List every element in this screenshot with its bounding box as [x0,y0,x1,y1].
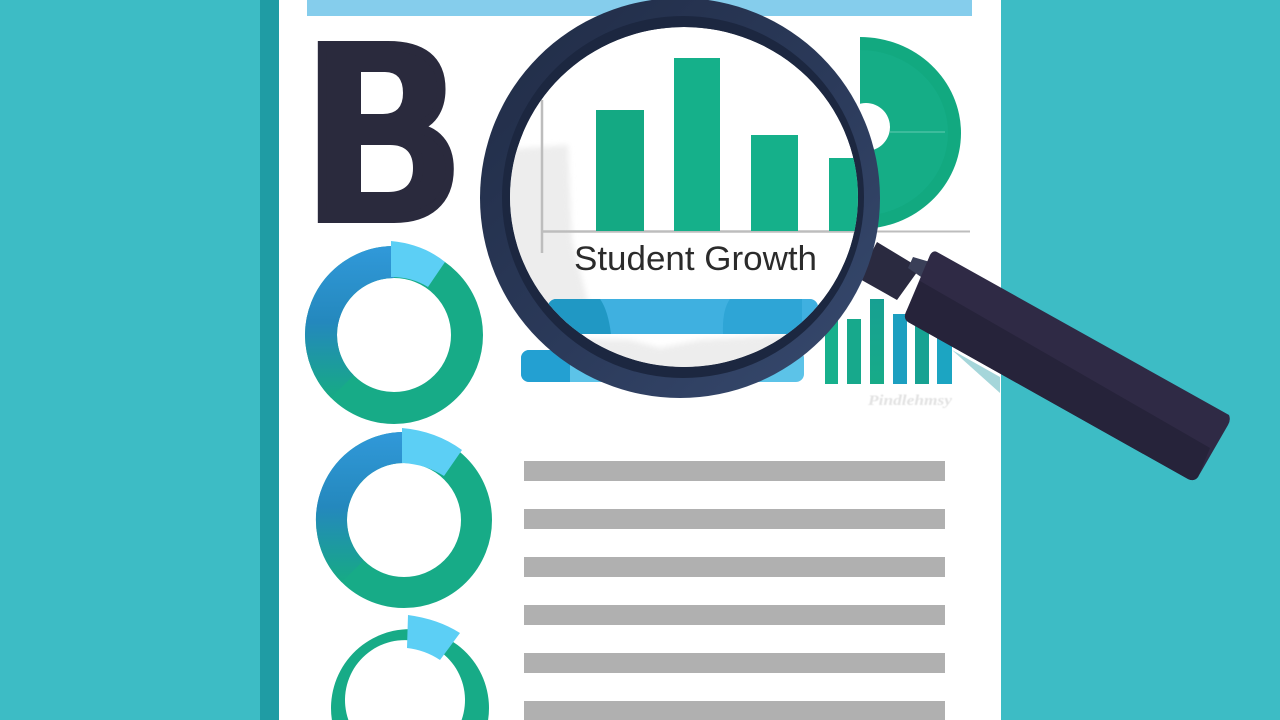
handle grip [905,251,1230,480]
donut chart 1 [321,241,467,408]
lens ring [480,0,880,398]
lens: axis [542,100,860,253]
faint caption: Pindlehmsy [868,393,952,409]
lens: bar chart [596,58,869,231]
lens: blue bar [548,299,818,334]
header bar [307,0,972,16]
document page [260,0,1001,720]
lens content [500,27,869,380]
handle shadow [952,350,1000,393]
lens: soft shadow [510,145,787,367]
blue progress bar [521,350,804,382]
text lines [524,461,945,720]
donut chart 2 [331,428,476,592]
infographic scene [260,0,1230,720]
magnifying glass [480,0,1230,480]
small bar chart [825,299,952,384]
lens caption: Student Growth: Student Growth [574,240,817,278]
handle neck [858,242,920,300]
pie chart: green [842,37,961,229]
donut chart 3 [331,615,489,720]
handle collar [908,257,930,279]
axis baseline [542,230,970,232]
